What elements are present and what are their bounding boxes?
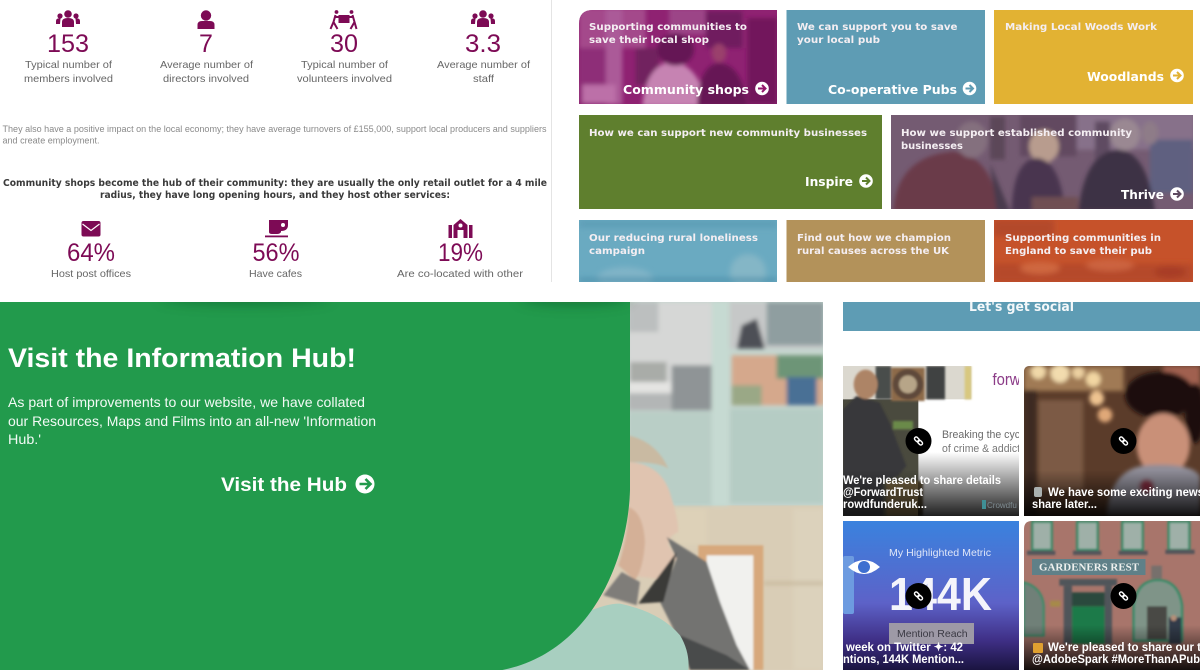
caption: rowdfunderuk... (843, 497, 927, 511)
label: staff (437, 59, 530, 85)
text block: hub description (8, 397, 376, 444)
icon: coffee cup (265, 220, 288, 237)
icon: building with clock (448, 219, 472, 238)
text block: local economy: and create employment. (2, 136, 100, 146)
tile: rural loneliness: Our reducing rural loneliness (589, 233, 758, 244)
label: volunteers: Typical number of (301, 59, 388, 71)
text block: hub of the community: radius, they have long opening hours, and they host other services: (100, 190, 450, 201)
social post: Forward Trust (843, 366, 1021, 516)
tile: woodlands: Woodlands (1087, 69, 1164, 84)
icon: link badge (906, 428, 932, 454)
text block: hub description: Hub.' (8, 431, 41, 447)
stat: 153: 153 (47, 30, 89, 58)
metric title: My Highlighted Metric (889, 547, 991, 559)
tile: co-operative pubs: We can support you to save (797, 22, 958, 33)
link: visit the hub: Visit the Hub (221, 475, 347, 496)
tile: thrive: Thrive (1121, 187, 1164, 202)
panel: community shop statistics (2, 10, 547, 280)
stat: 64%: 64% (67, 239, 115, 267)
caption (1032, 487, 1200, 508)
card text: of crime & addict (942, 443, 1020, 455)
text block: hub description: our Resources, Maps and Films into an all-new 'Information (8, 413, 376, 429)
crowdfunder mark: Crowdfu (987, 501, 1017, 510)
photo: man by a noticeboard (480, 302, 824, 670)
text block: hub of the community: Community shops become the hub of their community: they are usually the only retail outlet for a 4 mile (3, 178, 547, 189)
crowdfunder mark (982, 500, 1016, 509)
label: volunteers: volunteers involved (297, 73, 392, 85)
label: members: members involved (24, 73, 113, 85)
label: directors (160, 59, 253, 85)
text block: hub of the community (3, 178, 547, 201)
text block: local economy (2, 124, 547, 146)
label: directors: directors involved (163, 73, 249, 85)
tile: rural causes: rural causes across the UK (797, 246, 950, 257)
icon: volunteers carrying box (330, 11, 356, 29)
social post: exciting news (1024, 364, 1200, 517)
tile: save their pub: Supporting communities in (1005, 233, 1161, 244)
caption: week on Twitter ✦: 42 (845, 640, 963, 654)
tile: rural causes (786, 220, 985, 282)
button: mention reach (889, 623, 974, 644)
sign: GARDENERS REST (1039, 562, 1139, 574)
tile: community shops (579, 8, 777, 106)
tile: thrive (891, 113, 1195, 211)
logo text: forw (992, 370, 1021, 389)
icon: link badge (1110, 428, 1136, 454)
caption: @ForwardTrust (843, 485, 923, 499)
card text (942, 430, 1019, 452)
tile: inspire: How we can support new community businesses (589, 128, 867, 139)
tile: woodlands: Making Local Woods Work (1005, 22, 1157, 33)
tile: community shops: save their local shop (589, 35, 709, 46)
caption (844, 642, 964, 665)
photo: pub front (1024, 522, 1195, 644)
text block: hub description: As part of improvements to our website, we have collated (8, 394, 365, 410)
panel: information hub hero (0, 288, 824, 670)
panel: link tiles (579, 8, 1195, 291)
card text: Breaking the cyc (942, 429, 1020, 441)
tile: save their pub: England to save their pub (1005, 246, 1152, 257)
icon: members group (56, 10, 80, 27)
label: staff: Average number of (437, 59, 530, 71)
label: staff: staff (473, 73, 494, 85)
caption: ntions, 144K Mention... (843, 652, 964, 666)
label: members: Typical number of (25, 59, 112, 71)
tile: thrive: businesses (901, 141, 963, 152)
tile: rural loneliness (579, 220, 777, 282)
stat: 3.3: 3.3 (465, 30, 501, 58)
icon: cup emoji (1034, 487, 1042, 497)
tile: thrive: How we support established community (901, 128, 1132, 139)
icon: staff group (471, 10, 495, 27)
icon: link badge (1110, 583, 1136, 609)
tile: save their pub (994, 220, 1193, 282)
icon: link badge (906, 583, 932, 609)
icon: envelope (82, 221, 100, 236)
caption: share later... (1032, 497, 1097, 511)
link: visit the hub (221, 474, 374, 494)
stat: 30: 30 (330, 30, 358, 58)
photo: laughing girl (1024, 364, 1200, 517)
tile: rural loneliness: campaign (589, 246, 645, 257)
tile: inspire: Inspire (805, 174, 853, 189)
tile: co-operative pubs: your local pub (797, 35, 880, 46)
caption: We're pleased to share details (843, 473, 1001, 487)
tile: rural causes: Find out how we champion (797, 233, 951, 244)
tile: community shops: Community shops (623, 82, 749, 97)
caption (843, 475, 1001, 508)
stat: 19%: 19% (438, 239, 483, 267)
icon: note emoji (1033, 643, 1043, 653)
label: directors: Average number of (160, 59, 253, 71)
label: cafes: Have cafes (249, 268, 302, 280)
tile: woodlands (994, 10, 1193, 104)
metric value: 144K (889, 568, 992, 620)
tile: co-operative pubs: Co-operative Pubs (828, 82, 957, 97)
tile: community shops: Supporting communities to (589, 22, 747, 33)
social post: Twitter metric (843, 521, 1019, 670)
heading: Let's get social (969, 300, 1074, 315)
label: post offices: Host post offices (51, 268, 131, 280)
button: mention reach: Mention Reach (897, 628, 968, 640)
stat: 7: 7 (199, 30, 213, 58)
icon: director person (198, 10, 214, 29)
label: members (24, 59, 113, 85)
text block: local economy: They also have a positive impact on the local economy; they have average turnovers of £155,000, support local producers and suppliers (2, 124, 547, 134)
caption (1032, 640, 1200, 666)
shape: green panel (0, 302, 630, 670)
panel: social banner (843, 300, 1200, 331)
label: co-located: Are co-located with other (397, 268, 524, 280)
sign (1032, 559, 1146, 575)
tile: inspire (579, 115, 882, 209)
heading: Visit the Information Hub! (8, 343, 356, 373)
shading along the top edge (168, 302, 632, 310)
stat: 56%: 56% (252, 239, 300, 267)
photo: man in workshop (843, 366, 971, 516)
tile: co-operative pubs (786, 10, 985, 104)
label: volunteers (297, 59, 392, 85)
social post: Gardeners Rest (1024, 521, 1200, 670)
